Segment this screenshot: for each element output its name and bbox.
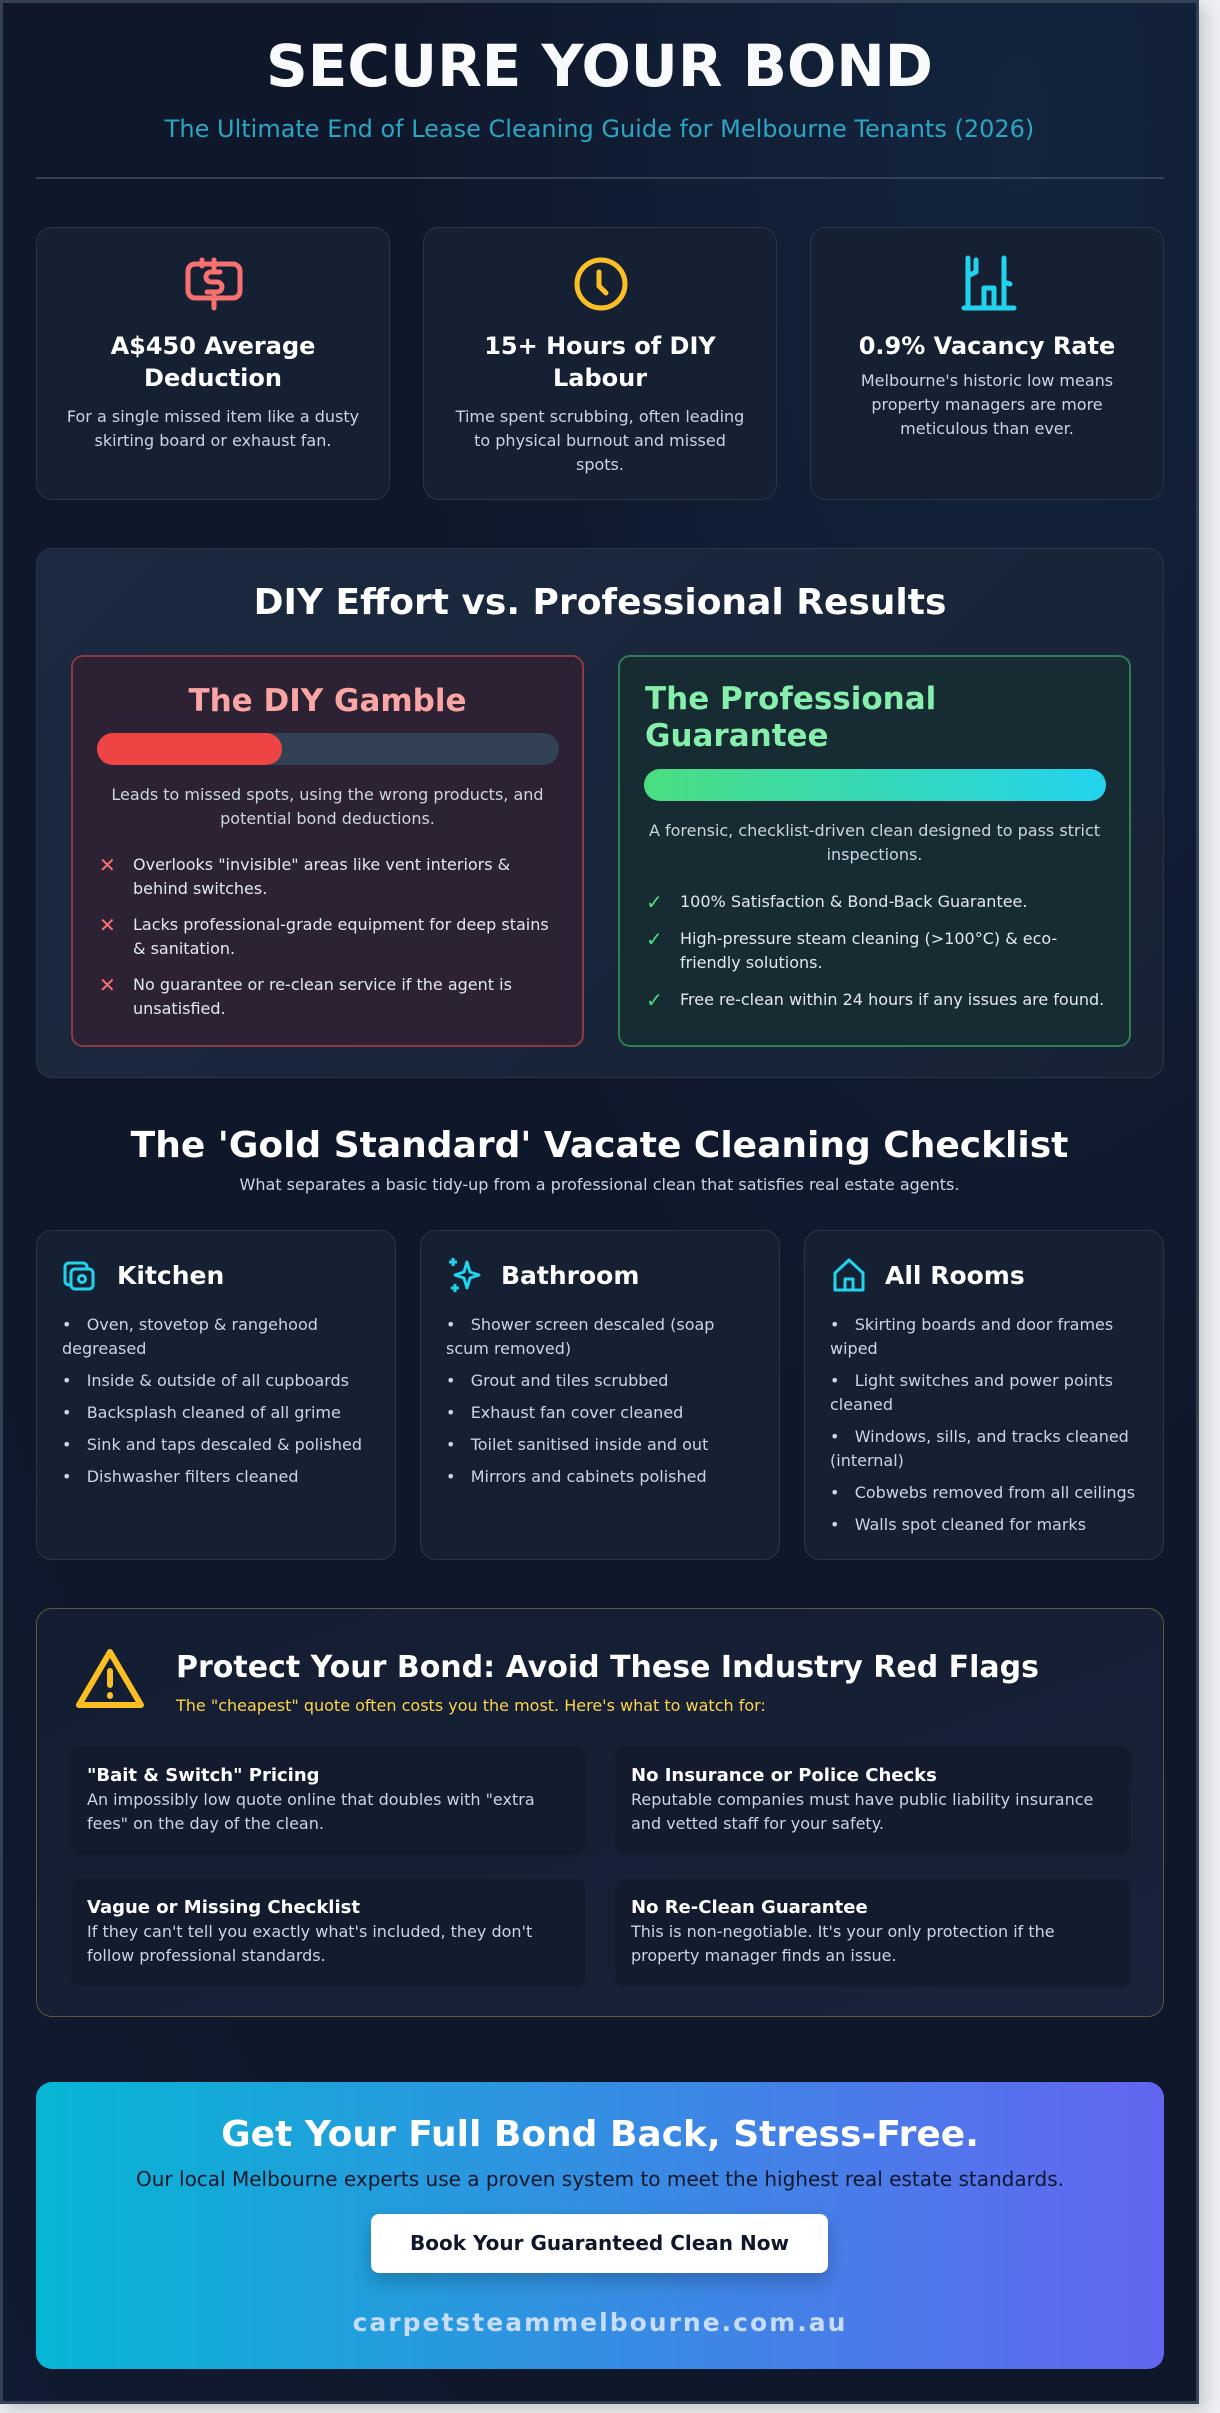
CTA button: Book Your Guaranteed Clean Now <box>410 2231 789 2255</box>
stat title: 0.9% Vacancy Rate <box>859 332 1115 360</box>
DIY list: No guarantee or re-clean service if the agent is unsatisfied. <box>133 975 512 1018</box>
all rooms list: • Light switches and power points cleaned <box>830 1371 1113 1414</box>
checklist cards <box>36 1230 1164 1560</box>
stat title: Labour <box>553 364 647 392</box>
all rooms list: • Windows, sills, and tracks cleaned (internal) <box>830 1427 1129 1470</box>
checklist subtitle: What separates a basic tidy-up from a professional clean that satisfies real estate agents. <box>240 1175 959 1194</box>
flag: insurance <box>615 1747 1131 1855</box>
flag: bait and switch: An impossibly low quote online that doubles with "extra fees" on the day of the clean. <box>87 1790 535 1833</box>
flag: insurance: No Insurance or Police Checks <box>631 1765 937 1786</box>
red flags subtitle: The "cheapest" quote often costs you the most. Here's what to watch for: <box>176 1696 766 1715</box>
card: all rooms <box>804 1230 1164 1560</box>
pro list: 100% Satisfaction & Bond-Back Guarantee. <box>680 892 1027 911</box>
icon: kitchen <box>64 1262 94 1290</box>
kitchen list: • Inside & outside of all cupboards <box>62 1371 349 1390</box>
red flags heading: Protect Your Bond: Avoid These Industry Red Flags <box>176 1650 1039 1685</box>
DIY list: ✕ <box>99 913 116 937</box>
DIY list <box>99 853 549 1018</box>
all rooms list: • Walls spot cleaned for marks <box>830 1515 1086 1534</box>
stat text: For a single missed item like a dusty skirting board or exhaust fan. <box>67 407 359 450</box>
card: kitchen <box>36 1230 396 1560</box>
stat title <box>110 332 315 392</box>
stat card: vacancy <box>810 227 1164 500</box>
website URL: carpetsteammelbourne.com.au <box>353 2308 847 2337</box>
bathroom list: • Exhaust fan cover cleaned <box>446 1403 683 1422</box>
stat text: Melbourne's historic low means property managers are more meticulous than ever. <box>861 371 1113 438</box>
CTA banner <box>36 2082 1164 2369</box>
card: bathroom <box>420 1230 780 1560</box>
CTA subtext: Our local Melbourne experts use a proven system to meet the highest real estate standards. <box>136 2167 1064 2191</box>
all rooms list: • Cobwebs removed from all ceilings <box>830 1483 1135 1502</box>
flag: insurance: Reputable companies must have public liability insurance and vetted staff for your safety. <box>631 1790 1093 1833</box>
bathroom list: • Toilet sanitised inside and out <box>446 1435 708 1454</box>
card title: Bathroom <box>501 1261 639 1290</box>
pro list: High-pressure steam cleaning (>100°C) & eco-friendly solutions. <box>680 929 1057 972</box>
icon: sparkle <box>449 1258 480 1292</box>
pro description: A forensic, checklist-driven clean designed to pass strict inspections. <box>649 821 1100 864</box>
kitchen list: • Oven, stovetop & rangehood degreased <box>62 1315 318 1358</box>
flag: re-clean: No Re-Clean Guarantee <box>631 1897 868 1918</box>
flag: bait and switch <box>71 1747 586 1855</box>
pro list: Free re-clean within 24 hours if any issues are found. <box>680 990 1104 1009</box>
card title: Kitchen <box>117 1261 224 1290</box>
all rooms list <box>830 1315 1135 1534</box>
kitchen list: • Dishwasher filters cleaned <box>62 1467 298 1486</box>
CTA button <box>371 2214 828 2273</box>
kitchen list: • Backsplash cleaned of all grime <box>62 1403 341 1422</box>
checklist heading: The 'Gold Standard' Vacate Cleaning Checklist <box>131 1125 1068 1166</box>
stat title: 15+ Hours of DIY <box>484 332 716 360</box>
pro title <box>645 681 936 754</box>
panel: DIY vs professional <box>36 548 1164 1078</box>
pro title: Guarantee <box>645 718 829 754</box>
icon: chart <box>962 256 1016 310</box>
kitchen list: • Sink and taps descaled & polished <box>62 1435 362 1454</box>
flag: checklist: Vague or Missing Checklist <box>87 1897 360 1918</box>
panel: professional guarantee <box>618 655 1131 1047</box>
DIY list: ✕ <box>99 853 116 877</box>
stat title <box>484 332 716 392</box>
flag: bait and switch: "Bait & Switch" Pricing <box>87 1765 320 1786</box>
icon: warning <box>76 1649 144 1708</box>
heading: DIY Effort vs. Professional Results <box>254 582 946 623</box>
panel: DIY gamble <box>71 655 584 1047</box>
bathroom list <box>446 1315 714 1486</box>
DIY title: The DIY Gamble <box>188 683 467 719</box>
bathroom list: • Mirrors and cabinets polished <box>446 1467 707 1486</box>
pro list <box>646 890 1104 1012</box>
bathroom list: • Shower screen descaled (soap scum removed) <box>446 1315 714 1358</box>
stat text: Time spent scrubbing, often leading to physical burnout and missed spots. <box>456 407 744 474</box>
kitchen list <box>62 1315 362 1486</box>
pro list: ✓ <box>646 890 663 914</box>
DIY list: ✕ <box>99 973 116 997</box>
flag: checklist: If they can't tell you exactly what's included, they don't follow professional standards. <box>87 1922 532 1965</box>
icon: clock <box>574 258 628 310</box>
title: SECURE YOUR BOND <box>266 32 933 100</box>
flag: checklist <box>71 1879 586 1987</box>
stat title: Deduction <box>144 364 282 392</box>
stat cards <box>36 227 1164 500</box>
flag: re-clean: This is non-negotiable. It's your only protection if the property manager finds an issue. <box>631 1922 1055 1965</box>
stat card: hours <box>423 227 777 500</box>
stat card: deduction <box>36 227 390 500</box>
stat title: A$450 Average <box>111 332 315 360</box>
pro list: ✓ <box>646 927 663 951</box>
flag: re-clean <box>615 1879 1131 1987</box>
icon: house <box>834 1258 864 1292</box>
panel: red flags <box>36 1608 1164 2017</box>
all rooms list: • Skirting boards and door frames wiped <box>830 1315 1113 1358</box>
card title: All Rooms <box>885 1261 1025 1290</box>
icon: money <box>186 258 242 310</box>
DIY list: Overlooks "invisible" areas like vent interiors & behind switches. <box>133 855 510 898</box>
subtitle: The Ultimate End of Lease Cleaning Guide for Melbourne Tenants (2026) <box>165 115 1034 143</box>
DIY list: Lacks professional-grade equipment for deep stains & sanitation. <box>133 915 549 958</box>
bar chart: pro <box>644 769 1106 801</box>
bar chart: DIY <box>97 733 559 765</box>
pro list: ✓ <box>646 988 663 1012</box>
DIY description: Leads to missed spots, using the wrong products, and potential bond deductions. <box>111 785 544 828</box>
bathroom list: • Grout and tiles scrubbed <box>446 1371 668 1390</box>
pro title: The Professional <box>645 681 936 717</box>
CTA heading: Get Your Full Bond Back, Stress-Free. <box>221 2114 979 2155</box>
